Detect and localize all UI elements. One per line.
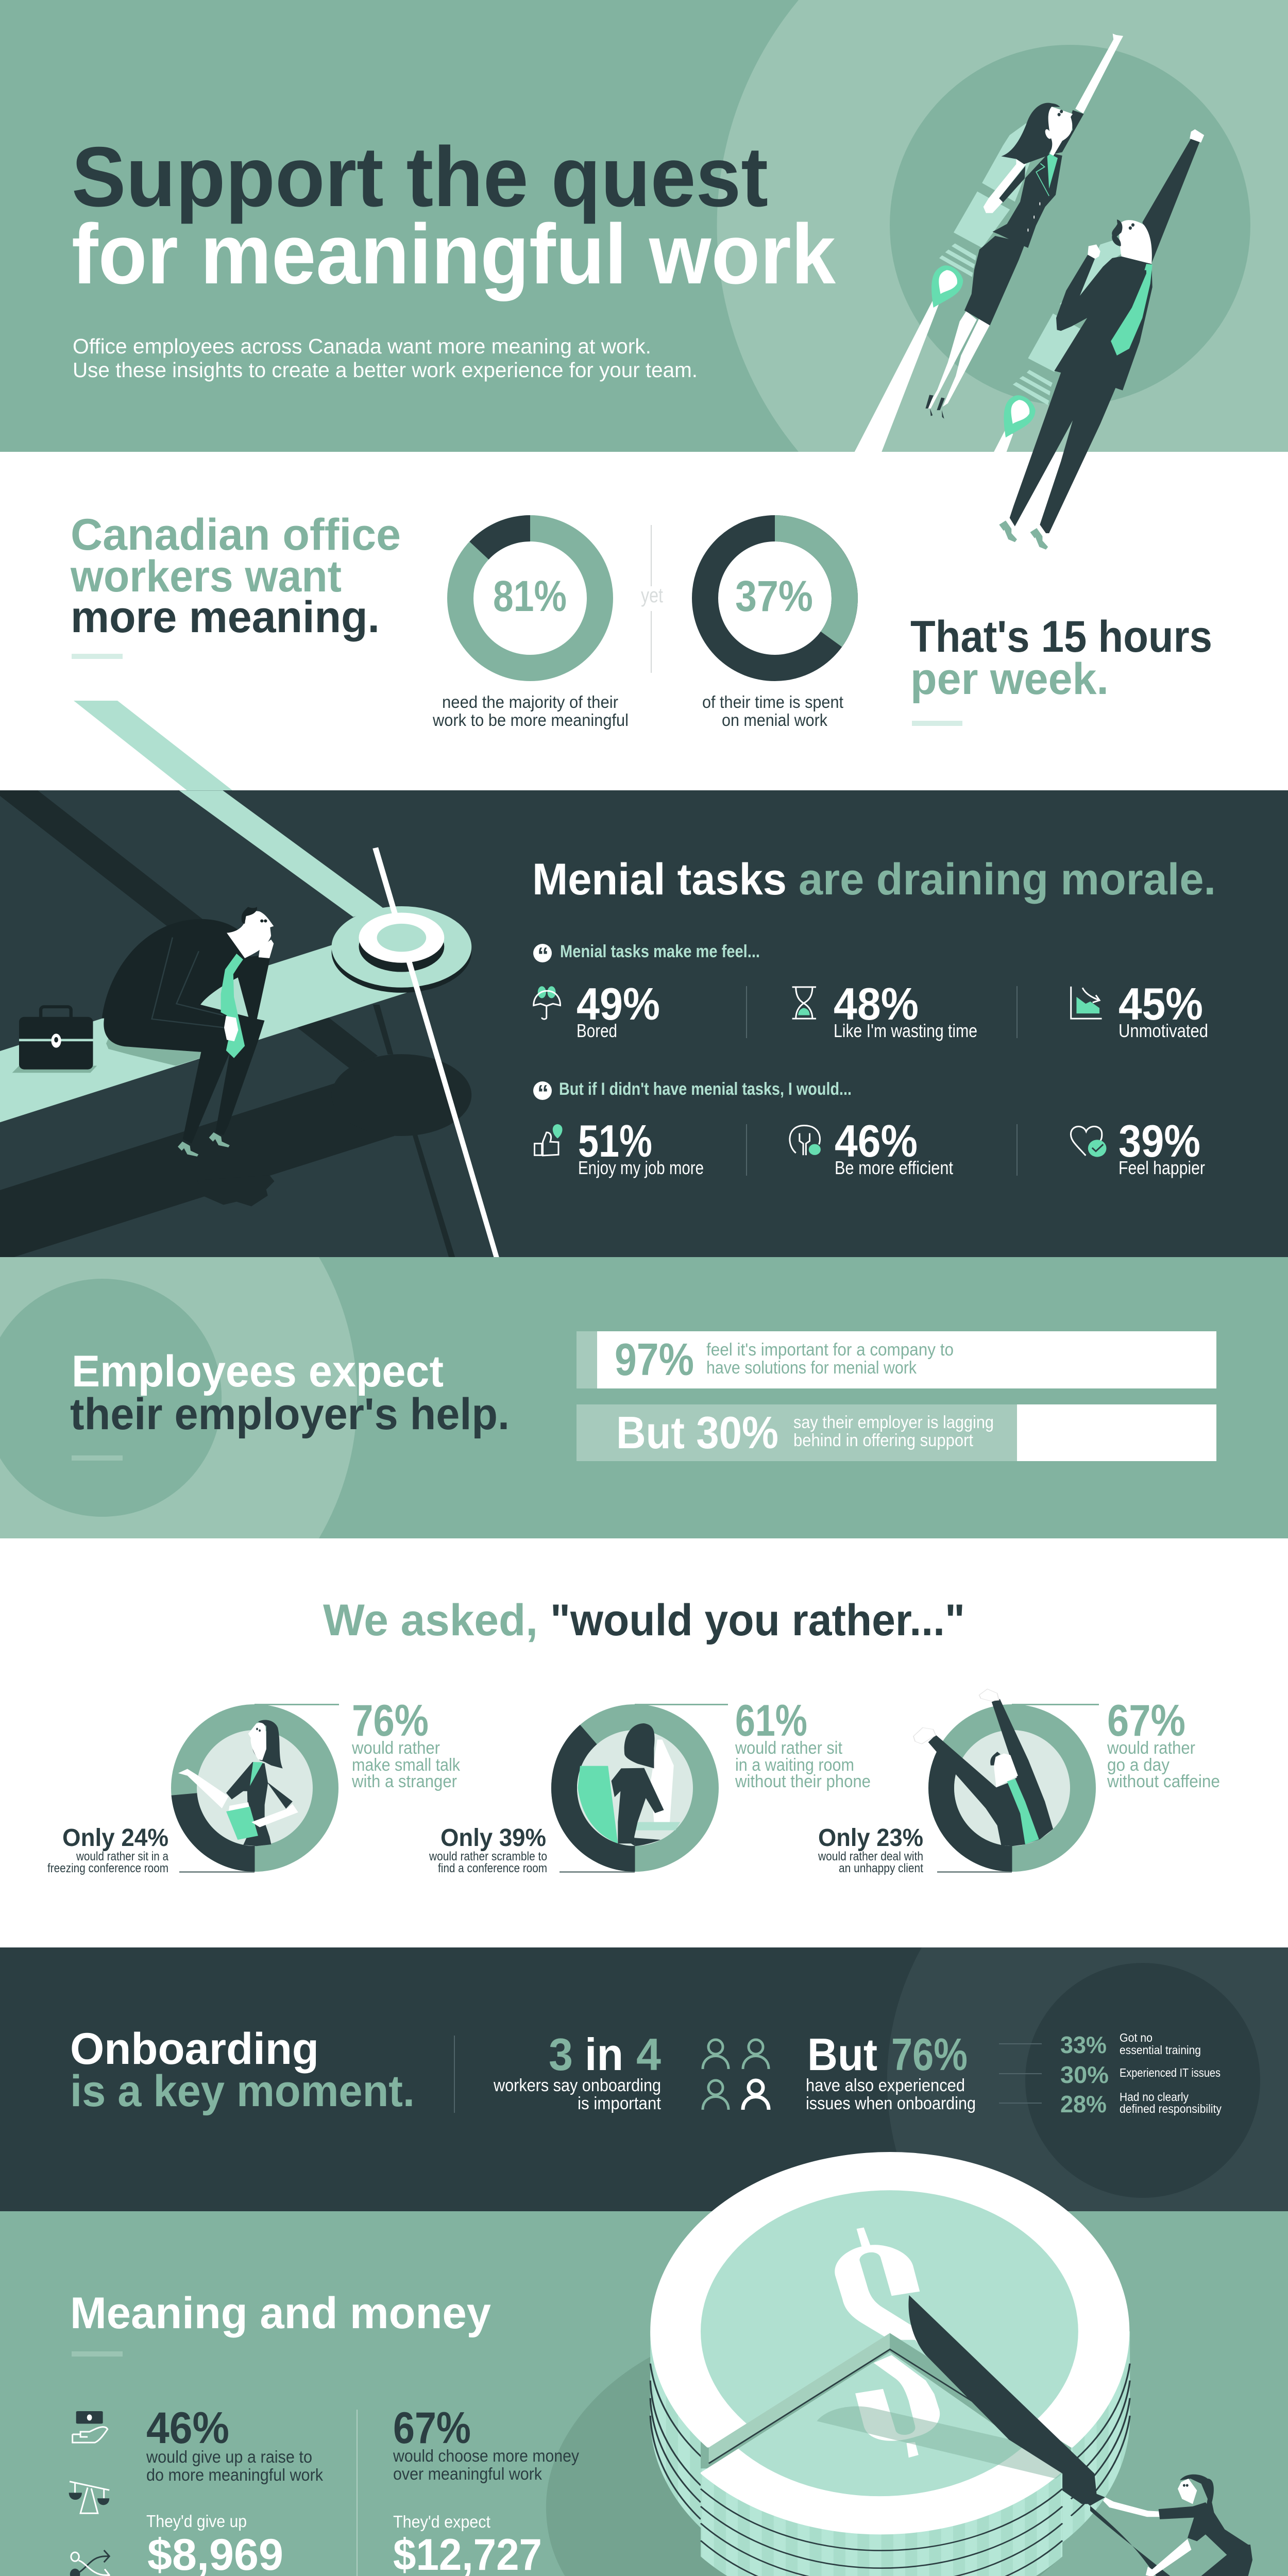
subheading: make me feel — [533, 942, 760, 968]
stat: 46% give up raise: 46% — [146, 2403, 229, 2453]
stat: 51% enjoy job: Enjoy my job more — [578, 1157, 704, 1178]
chart: 67% no caffeine: without caffeine — [1107, 1772, 1220, 1791]
panel: employer help — [0, 1257, 1288, 1538]
stat: 3 in 4 — [493, 2029, 662, 2113]
icon: four people — [703, 2040, 769, 2110]
chart: 67% no caffeine — [818, 1689, 1220, 1875]
illustration: woman in waiting room — [578, 1723, 680, 1846]
list: onboarding issues: Experienced IT issues — [1120, 2066, 1221, 2079]
stat: 39% happier: 39% — [1118, 1115, 1200, 1166]
chart: 61% waiting room — [429, 1696, 871, 1875]
illustration: flying office workers — [855, 33, 1204, 550]
stat: 67% choose money: 67% — [393, 2403, 471, 2453]
bar: 30%: say their employer is lagging — [793, 1413, 994, 1432]
heading: employees expect: their employer's help. — [70, 1389, 510, 1439]
illustration: woman with folder — [178, 1720, 298, 1846]
icon: money in hand — [73, 2411, 108, 2443]
panel background: meaning and money — [0, 2211, 1288, 2576]
hero subtitle: Use these insights to create a better work experience for your team. — [73, 358, 698, 382]
stat: 3 in 4: 3 — [549, 2029, 573, 2080]
list: onboarding issues: 30% — [1060, 2061, 1109, 2088]
title — [72, 129, 836, 301]
stat: 67% choose money: over meaningful work — [393, 2464, 542, 2483]
donut chart: 37%: 37% — [735, 572, 813, 620]
section background: canadian office workers — [0, 452, 1288, 791]
stat: but 76%: have also experienced — [806, 2076, 965, 2095]
chart: 76% small talk: with a stranger — [351, 1772, 457, 1791]
chart: 76% small talk: would rather sit in a — [76, 1850, 169, 1863]
subheading: if no menial tasks: But if I didn't have menial tasks, I would... — [559, 1079, 852, 1099]
chart: 76% small talk: Only 24% — [62, 1824, 168, 1852]
heading: employees expect: Employees expect — [72, 1347, 444, 1396]
stat: 51% enjoy job — [535, 1115, 704, 1178]
subheading: make me feel: Menial tasks make me feel... — [560, 942, 760, 961]
stat: 48% wasting time: 48% — [834, 978, 919, 1029]
stat: 49% bored: Bored — [577, 1020, 617, 1041]
list: onboarding issues: Had no clearly — [1120, 2090, 1189, 2104]
illustration: man with raised arms — [913, 1689, 1053, 1846]
icon: hourglass — [792, 987, 816, 1019]
stat: but 76%: 76% — [891, 2029, 968, 2080]
donut chart: 37%: on menial work — [722, 710, 827, 730]
hero background — [0, 0, 1288, 452]
bar: 30%: behind in offering support — [793, 1431, 973, 1450]
chart: 61% waiting room: would rather scramble to — [429, 1850, 547, 1863]
stat: 3 in 4: workers say onboarding — [493, 2076, 661, 2095]
stat: 45% unmotivated: Unmotivated — [1118, 1020, 1208, 1041]
chart: 61% waiting room: without their phone — [735, 1772, 871, 1791]
heading: we asked: We asked, — [323, 1596, 538, 1645]
bar: 30% — [577, 1404, 1216, 1461]
band: mint diagonal beam — [74, 701, 392, 922]
list: onboarding issues: 28% — [1060, 2091, 1107, 2117]
stat: 67% choose money — [393, 2403, 600, 2576]
chart: 61% waiting room: 61% — [735, 1696, 807, 1745]
heading: we asked: "would you rather..." — [550, 1596, 965, 1645]
list: onboarding issues: 33% — [1060, 2031, 1107, 2058]
heading: menial tasks — [532, 855, 1216, 904]
chart: 61% waiting room: in a waiting room — [735, 1755, 854, 1775]
illustration: coin cut by knife — [546, 2152, 1268, 2576]
stat: 3 in 4: 4 — [636, 2029, 661, 2080]
heading: canadian office workers: Canadian office — [71, 510, 401, 560]
stat: 46% give up raise — [146, 2403, 323, 2576]
stat: 45% unmotivated — [1071, 978, 1208, 1041]
stat: 3 in 4: in — [585, 2029, 623, 2080]
title: Support the quest — [72, 129, 768, 224]
stat: 48% wasting time — [792, 978, 977, 1041]
callout: 15 hours per week: That's 15 hours — [910, 612, 1212, 662]
heading: onboarding — [70, 2024, 415, 2116]
heading: onboarding: Onboarding — [70, 2024, 319, 2074]
subheading: if no menial tasks — [533, 1079, 852, 1106]
chart: 67% no caffeine: go a day — [1107, 1755, 1170, 1775]
bar: 97%: 97% — [615, 1334, 694, 1385]
stat: 3 in 4: is important — [578, 2094, 662, 2113]
stat: 49% bored: 49% — [577, 978, 660, 1029]
chart: 67% no caffeine: an unhappy client — [839, 1861, 923, 1875]
heading: canadian office workers: workers want — [70, 552, 342, 601]
icon: umbrella — [534, 986, 561, 1019]
chart: 76% small talk — [47, 1696, 461, 1875]
stat: 48% wasting time: Like I'm wasting time — [834, 1020, 977, 1041]
donut chart: 81% — [432, 515, 629, 730]
icon: wrench and gear — [790, 1126, 821, 1155]
heading: we asked — [323, 1596, 965, 1645]
heading: canadian office workers — [70, 510, 401, 659]
list: onboarding issues: defined responsibility — [1120, 2102, 1222, 2115]
chart: 67% no caffeine: 67% — [1107, 1696, 1185, 1745]
yet divider: yet — [641, 584, 663, 607]
callout: 15 hours per week: per week. — [910, 654, 1109, 704]
heading: onboarding: is a key moment. — [70, 2066, 415, 2116]
list: onboarding issues: Got no — [1120, 2031, 1153, 2044]
chart: 76% small talk: 76% — [352, 1696, 429, 1745]
chart: 76% small talk: freezing conference room — [47, 1861, 168, 1875]
chart: 76% small talk: would rather — [351, 1738, 440, 1758]
list: onboarding issues: essential training — [1120, 2043, 1201, 2057]
hero subtitle: Office employees across Canada want more meaning at work. — [73, 334, 651, 358]
icon: scales — [69, 2482, 109, 2513]
heading: menial tasks: are draining morale. — [799, 855, 1216, 904]
chart: 76% small talk: make small talk — [352, 1755, 461, 1775]
bar: 97% — [577, 1331, 1216, 1388]
stat: 39% happier — [1071, 1115, 1205, 1178]
stat: but 76% — [806, 2029, 976, 2113]
chart: 67% no caffeine: would rather deal with — [818, 1850, 923, 1863]
chart: 61% waiting room: would rather sit — [735, 1738, 842, 1758]
donut chart: 81%: need the majority of their — [442, 692, 618, 711]
figure: woman pushing knife — [1103, 2475, 1268, 2576]
chart: 61% waiting room: Only 39% — [440, 1824, 546, 1852]
stat: 46% efficient — [790, 1115, 953, 1178]
panel: onboarding — [0, 1947, 1288, 2212]
stat: 45% unmotivated: 45% — [1118, 978, 1203, 1029]
chart: 67% no caffeine: Only 23% — [818, 1824, 923, 1852]
stat: 46% give up raise: would give up a raise to — [146, 2447, 312, 2466]
bar: 97%: have solutions for menial work — [706, 1358, 917, 1378]
stat: 67% choose money: They'd expect — [393, 2512, 490, 2531]
heading: canadian office workers: more meaning. — [71, 592, 380, 642]
subheading: if no menial tasks: “ — [537, 1080, 549, 1106]
panel: would you rather — [0, 1538, 1288, 1947]
stat: 46% efficient: Be more efficient — [835, 1157, 953, 1178]
list: onboarding issues — [999, 2031, 1222, 2117]
stat: 67% choose money: would choose more money — [393, 2446, 579, 2465]
icon: thumbs up — [535, 1124, 563, 1156]
knife — [908, 2295, 1221, 2576]
stat: 51% enjoy job: 51% — [578, 1115, 652, 1166]
heading: meaning and money: Meaning and money — [70, 2289, 491, 2338]
icon: crossing arrows — [70, 2550, 109, 2576]
title: for meaningful work — [72, 207, 836, 301]
illustration: man sitting on clock hand — [0, 790, 499, 1257]
stat: 46% give up raise: do more meaningful work — [146, 2465, 323, 2484]
donut chart: 81%: 81% — [493, 572, 567, 620]
stat: 46% give up raise: They'd give up — [146, 2512, 247, 2531]
donut chart: 37%: of their time is spent — [702, 692, 843, 711]
heading: employees expect — [70, 1347, 510, 1461]
panel: menial tasks — [0, 790, 1288, 1257]
callout: 15 hours per week — [910, 612, 1212, 726]
icon: heart with check — [1071, 1126, 1107, 1157]
stat: 39% happier: Feel happier — [1118, 1157, 1205, 1178]
donut chart: 37% — [702, 515, 858, 730]
stat: 46% efficient: 46% — [835, 1115, 918, 1166]
donut chart: 81%: work to be more meaningful — [432, 710, 629, 730]
heading: menial tasks: Menial tasks — [532, 855, 787, 904]
stat: but 76%: But — [807, 2029, 877, 2080]
icon: falling chart — [1071, 987, 1102, 1019]
chart: 67% no caffeine: would rather — [1107, 1738, 1195, 1758]
stat: but 76%: issues when onboarding — [806, 2094, 976, 2113]
panel: meaning and money text — [69, 2289, 600, 2576]
stat: 49% bored — [534, 978, 660, 1041]
chart: 61% waiting room: find a conference room — [438, 1861, 547, 1875]
hero subtitle — [73, 334, 698, 382]
bar: 30%: But 30% — [616, 1407, 778, 1458]
bar: 97%: feel it's important for a company to — [706, 1340, 954, 1360]
subheading: make me feel: “ — [537, 943, 549, 968]
